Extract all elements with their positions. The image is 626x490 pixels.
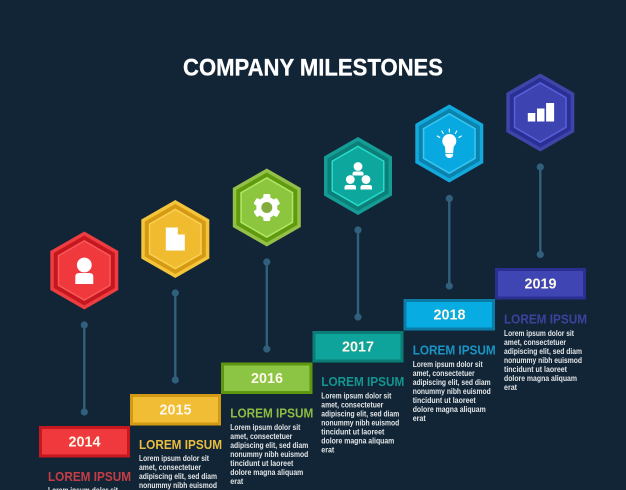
body text: Lorem ipsum dolor sit [504, 328, 574, 338]
body text: tincidunt ut laoreet [321, 426, 384, 436]
year bar: 2018 [434, 306, 466, 324]
body text: erat [321, 444, 334, 454]
connector line [263, 258, 270, 353]
body text: amet, consectetuer [321, 400, 384, 410]
hexagon icon: bar chart [506, 74, 574, 152]
hexagon icon: light bulb [415, 104, 483, 182]
body text: amet, consectetuer [230, 431, 293, 441]
heading: LOREM IPSUM [413, 342, 496, 358]
body text [504, 328, 582, 392]
milestone 2016 [221, 168, 313, 486]
body text [139, 453, 217, 490]
year bar: 2015 [160, 402, 192, 418]
body text: amet, consectetuer [504, 337, 567, 347]
body text: tincidunt ut laoreet [230, 458, 293, 468]
hexagon icon: gear [233, 168, 301, 246]
connector line [172, 289, 179, 384]
connector line [354, 226, 362, 321]
connector line [81, 321, 88, 416]
heading: LOREM IPSUM [139, 437, 222, 452]
body text: nonummy nibh euismod [413, 386, 491, 396]
body text [413, 359, 491, 423]
body text: erat [413, 413, 426, 423]
milestone 2019 [495, 74, 587, 392]
body text: tincidunt ut laoreet [504, 364, 567, 374]
year bar [130, 394, 221, 426]
year bar: 2016 [251, 370, 283, 387]
title: COMPANY MILESTONES [183, 54, 443, 82]
milestone 2014 [39, 232, 131, 490]
body text: nonummy nibh euismod [504, 355, 582, 365]
heading: LOREM IPSUM [230, 406, 313, 420]
connector line [537, 163, 544, 258]
body text [230, 422, 308, 486]
milestone 2017 [312, 137, 404, 454]
body text: adipiscing elit, sed diam [321, 408, 399, 418]
body text: nonummy nibh euismod [139, 480, 217, 490]
year bar [495, 268, 586, 300]
year bar [312, 331, 404, 362]
body text: dolore magna aliquam [321, 436, 394, 446]
hexagon icon: document [141, 200, 209, 278]
body text: amet, consectetuer [413, 368, 475, 378]
body text [321, 390, 399, 454]
body text: erat [504, 382, 517, 392]
body text: nonummy nibh euismod [321, 418, 399, 428]
year bar [404, 299, 495, 330]
year bar [39, 426, 130, 458]
body text: nonummy nibh euismod [230, 449, 308, 459]
body text: dolore magna aliquam [504, 373, 577, 383]
body text: erat [230, 476, 243, 486]
body text: adipiscing elit, sed diam [504, 346, 582, 356]
body text: tincidunt ut laoreet [413, 395, 476, 405]
body text: amet, consectetuer [139, 462, 202, 472]
body text: adipiscing elit, sed diam [139, 471, 217, 481]
year bar: 2019 [524, 276, 556, 292]
body text: Lorem ipsum dolor sit [139, 453, 209, 463]
hexagon icon: team [324, 137, 392, 215]
year bar: 2017 [342, 338, 374, 356]
year bar: 2014 [68, 434, 101, 450]
body text: adipiscing elit, sed diam [230, 440, 308, 450]
body text: Lorem ipsum dolor sit [321, 390, 391, 400]
body text: adipiscing elit, sed diam [413, 377, 491, 387]
milestone 2015 [130, 200, 222, 490]
hexagon icon: person [50, 232, 118, 310]
heading: LOREM IPSUM [321, 374, 404, 389]
milestone 2018 [404, 104, 496, 423]
body text: Lorem ipsum dolor sit [230, 422, 300, 432]
connector line [446, 195, 453, 290]
body text: Lorem ipsum dolor sit [413, 359, 483, 369]
body text: dolore magna aliquam [413, 404, 486, 414]
heading: LOREM IPSUM [504, 312, 587, 326]
heading: LOREM IPSUM [48, 469, 131, 484]
year bar [221, 362, 312, 394]
body text: dolore magna aliquam [230, 467, 303, 477]
